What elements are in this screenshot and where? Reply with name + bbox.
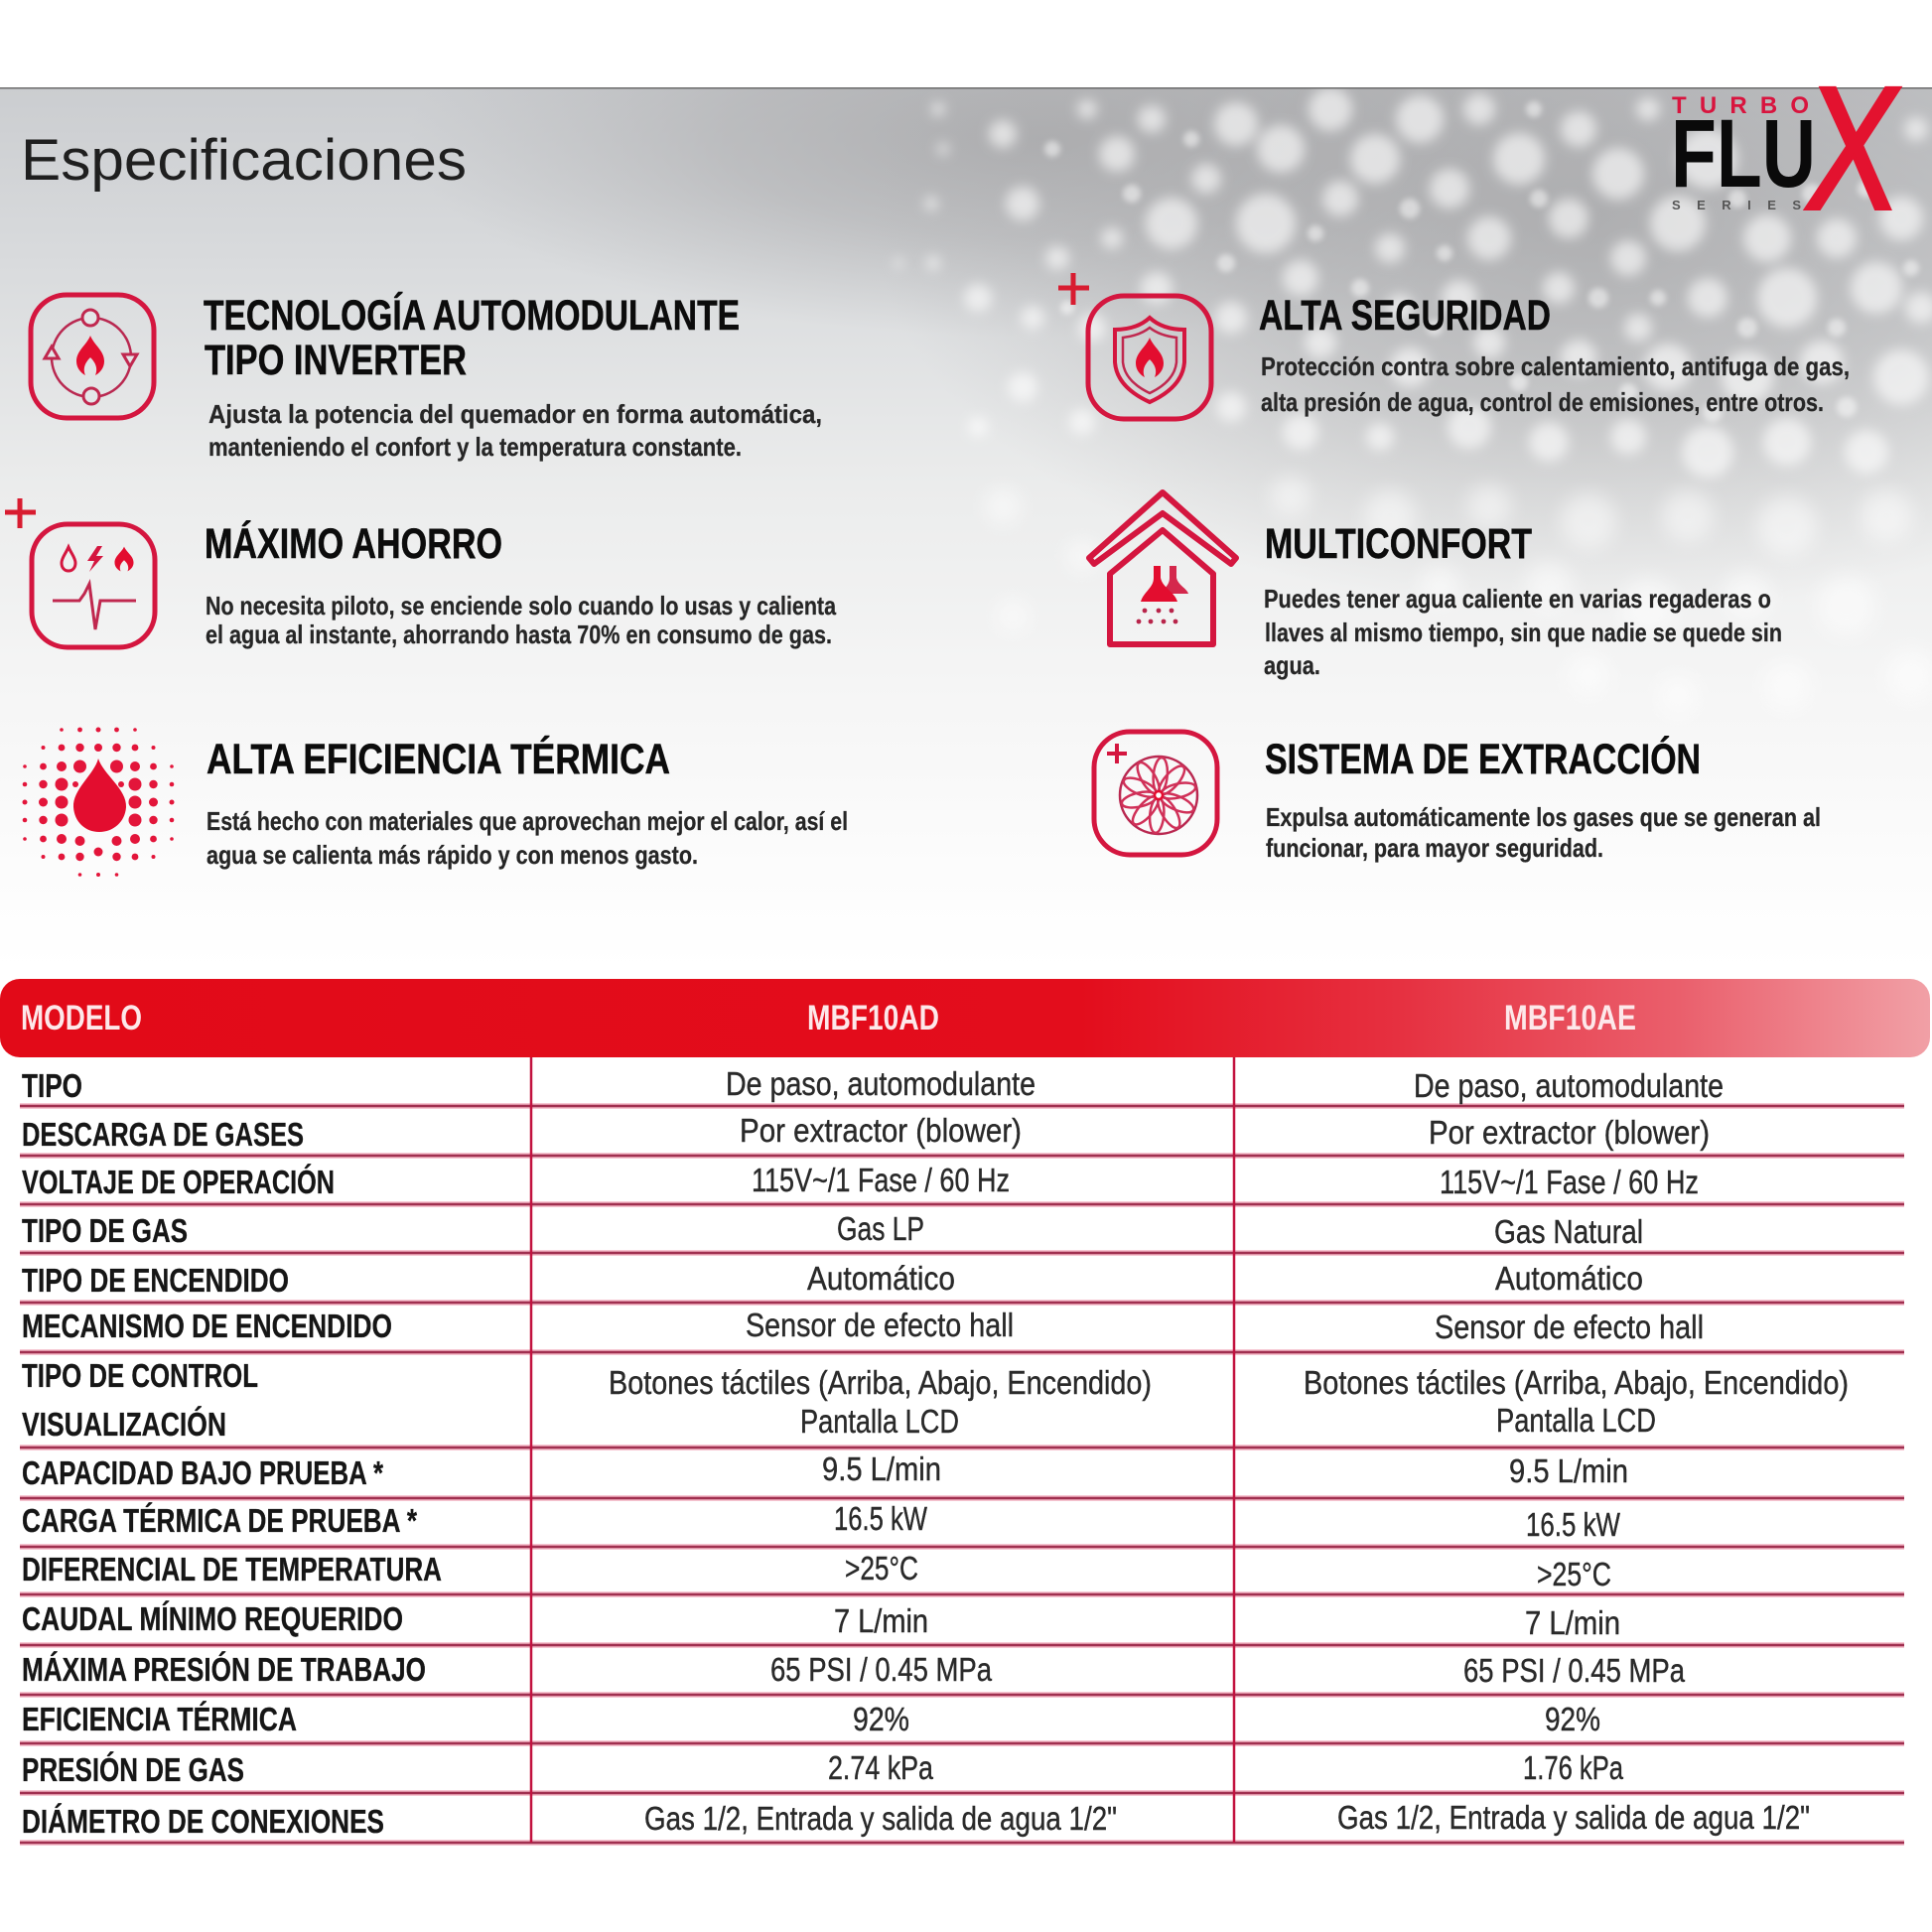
row: presión de gas: PRESIÓN DE GAS <box>22 1751 244 1788</box>
row: diámetro de conexiones: Gas 1/2, Entrada y salida de agua 1/2" <box>644 1800 1117 1837</box>
row: máxima presión de trabajo: MÁXIMA PRESIÓN DE TRABAJO <box>22 1651 426 1688</box>
logo: Turbo Flux Series: TURBO <box>1672 92 1809 119</box>
heading: MULTICONFORT <box>1265 520 1532 568</box>
row: diferencial de temperatura: >25°C <box>845 1550 918 1587</box>
row: descarga de gases: Por extractor (blower) <box>740 1112 1022 1149</box>
row: capacidad bajo prueba: CAPACIDAD BAJO PRUEBA * <box>22 1454 383 1491</box>
heading: ALTA EFICIENCIA TÉRMICA <box>207 736 670 783</box>
row: tipo <box>22 1065 1724 1104</box>
description <box>208 399 822 462</box>
icon: house with shower <box>1089 492 1236 644</box>
description: alta presión de agua, control de emisiones, entre otros. <box>1261 387 1824 417</box>
row: tipo de control y visualización: VISUALIZACIÓN <box>22 1406 226 1443</box>
description: llaves al mismo tiempo, sin que nadie se quede sin <box>1265 618 1782 647</box>
feature: alta eficiencia térmica <box>22 727 848 877</box>
feature: sistema de extracción <box>1094 732 1821 863</box>
row: tipo de control y visualización: Pantalla LCD <box>800 1403 959 1440</box>
row: carga térmica de prueba <box>22 1500 1621 1543</box>
row: tipo de control y visualización <box>22 1357 1849 1443</box>
background: grey water bokeh panel <box>0 87 1932 733</box>
row: caudal mínimo requerido <box>22 1600 1620 1641</box>
description <box>1266 802 1821 863</box>
heading: SISTEMA DE EXTRACCIÓN <box>1265 735 1701 783</box>
row: tipo de gas: TIPO DE GAS <box>22 1212 188 1249</box>
description: funcionar, para mayor seguridad. <box>1266 833 1603 863</box>
description <box>207 806 848 870</box>
table header: MODELO <box>21 999 142 1037</box>
description: Puedes tener agua caliente en varias regaderas o <box>1264 584 1771 614</box>
row: tipo de encendido: TIPO DE ENCENDIDO <box>22 1262 289 1299</box>
title: Especificaciones <box>21 128 467 193</box>
row: máxima presión de trabajo <box>22 1651 1686 1689</box>
feature: máximo ahorro <box>5 498 836 649</box>
feature: alta seguridad <box>1058 273 1850 419</box>
table header <box>0 979 1930 1057</box>
row: tipo de control y visualización: Botones táctiles (Arriba, Abajo, Encendido) <box>1304 1364 1849 1401</box>
description: Ajusta la potencia del quemador en forma automática, <box>208 399 822 429</box>
row: mecanismo de encendido <box>22 1307 1704 1345</box>
icon: halftone water drop <box>22 727 175 877</box>
icon: inverter flame cycle <box>31 295 154 418</box>
row: tipo de encendido <box>22 1260 1643 1299</box>
row: eficiencia térmica: 92% <box>853 1701 909 1737</box>
row: tipo de encendido: Automático <box>1495 1260 1643 1297</box>
description: Expulsa automáticamente los gases que se generan al <box>1266 802 1821 832</box>
row: diámetro de conexiones <box>22 1799 1810 1840</box>
row: tipo: De paso, automodulante <box>726 1065 1035 1102</box>
description: Protección contra sobre calentamiento, antifuga de gas, <box>1261 351 1850 381</box>
heading: TIPO INVERTER <box>205 337 467 384</box>
row: eficiencia térmica <box>22 1701 1600 1737</box>
table header: MBF10AE <box>1504 999 1636 1037</box>
description: agua. <box>1264 650 1320 680</box>
description <box>1261 351 1850 417</box>
heading: ALTA SEGURIDAD <box>1259 292 1551 340</box>
heading <box>204 292 740 384</box>
description: agua se calienta más rápido y con menos gasto. <box>207 840 698 870</box>
feature: multiconfort <box>1089 492 1782 680</box>
row: tipo: De paso, automodulante <box>1414 1067 1724 1104</box>
logo: Turbo Flux Series: X <box>1799 51 1909 246</box>
row: diferencial de temperatura: >25°C <box>1537 1556 1611 1592</box>
row: presión de gas: 2.74 kPa <box>828 1749 934 1786</box>
table header: MBF10AD <box>807 999 939 1037</box>
row: tipo de gas: Gas LP <box>837 1210 924 1247</box>
row: mecanismo de encendido: MECANISMO DE ENCENDIDO <box>22 1308 392 1344</box>
row: voltaje de operación: 115V~/1 Fase / 60 Hz <box>752 1162 1010 1198</box>
row: capacidad bajo prueba: 9.5 L/min <box>1509 1452 1628 1489</box>
row: eficiencia térmica: EFICIENCIA TÉRMICA <box>22 1701 297 1737</box>
row: caudal mínimo requerido: CAUDAL MÍNIMO REQUERIDO <box>22 1600 403 1637</box>
logo: Turbo Flux Series <box>1671 51 1909 246</box>
row: máxima presión de trabajo: 65 PSI / 0.45 MPa <box>770 1651 993 1688</box>
row: mecanismo de encendido: Sensor de efecto hall <box>1435 1309 1704 1345</box>
logo: Turbo Flux Series: SERIES <box>1672 198 1801 212</box>
row: carga térmica de prueba: CARGA TÉRMICA DE PRUEBA * <box>22 1502 417 1539</box>
row: tipo de encendido: Automático <box>807 1260 955 1297</box>
row: carga térmica de prueba: 16.5 kW <box>834 1500 928 1537</box>
description <box>1264 584 1782 680</box>
description: No necesita piloto, se enciende solo cuando lo usas y calienta <box>206 591 836 621</box>
row: tipo de control y visualización: Botones táctiles (Arriba, Abajo, Encendido) <box>609 1364 1152 1401</box>
row: eficiencia térmica: 92% <box>1545 1701 1600 1737</box>
row: presión de gas <box>22 1749 1623 1788</box>
row: voltaje de operación <box>22 1162 1699 1200</box>
description <box>206 591 836 649</box>
row: mecanismo de encendido: Sensor de efecto hall <box>746 1307 1014 1343</box>
row: voltaje de operación: VOLTAJE DE OPERACIÓN <box>22 1164 335 1200</box>
icon: extraction fan <box>1094 732 1217 855</box>
feature: tecnología automodulante <box>31 292 822 462</box>
icon: shield with flame <box>1058 273 1211 419</box>
row: tipo de gas <box>22 1210 1643 1250</box>
row: máxima presión de trabajo: 65 PSI / 0.45 MPa <box>1463 1652 1686 1689</box>
row: caudal mínimo requerido: 7 L/min <box>1525 1604 1620 1641</box>
row: tipo de control y visualización: TIPO DE CONTROL <box>22 1357 258 1394</box>
row: capacidad bajo prueba <box>22 1450 1628 1491</box>
row: tipo de control y visualización: Pantalla LCD <box>1496 1402 1656 1439</box>
row: presión de gas: 1.76 kPa <box>1523 1749 1623 1786</box>
description: manteniendo el confort y la temperatura constante. <box>208 432 742 462</box>
heading: MÁXIMO AHORRO <box>205 520 502 568</box>
row: descarga de gases <box>22 1112 1710 1153</box>
description: el agua al instante, ahorrando hasta 70% en consumo de gas. <box>206 620 832 649</box>
row: diámetro de conexiones: DIÁMETRO DE CONEXIONES <box>22 1803 384 1840</box>
specification table <box>0 979 1930 1843</box>
row: caudal mínimo requerido: 7 L/min <box>834 1602 928 1639</box>
row: carga térmica de prueba: 16.5 kW <box>1526 1506 1621 1543</box>
row: diferencial de temperatura: DIFERENCIAL DE TEMPERATURA <box>22 1551 442 1587</box>
row: diámetro de conexiones: Gas 1/2, Entrada y salida de agua 1/2" <box>1337 1799 1810 1836</box>
row: voltaje de operación: 115V~/1 Fase / 60 Hz <box>1440 1164 1699 1200</box>
heading: TECNOLOGÍA AUTOMODULANTE <box>204 292 740 340</box>
row: descarga de gases: DESCARGA DE GASES <box>22 1116 304 1153</box>
icon: drop, bolt, flame with pulse <box>5 498 155 647</box>
row: descarga de gases: Por extractor (blower) <box>1429 1114 1710 1151</box>
row: diferencial de temperatura <box>22 1550 1611 1592</box>
logo: Turbo Flux Series: FLU <box>1671 99 1816 207</box>
description: Está hecho con materiales que aprovechan mejor el calor, así el <box>207 806 848 836</box>
row: capacidad bajo prueba: 9.5 L/min <box>822 1450 941 1487</box>
row: tipo: TIPO <box>22 1067 82 1104</box>
row: tipo de gas: Gas Natural <box>1494 1213 1643 1250</box>
